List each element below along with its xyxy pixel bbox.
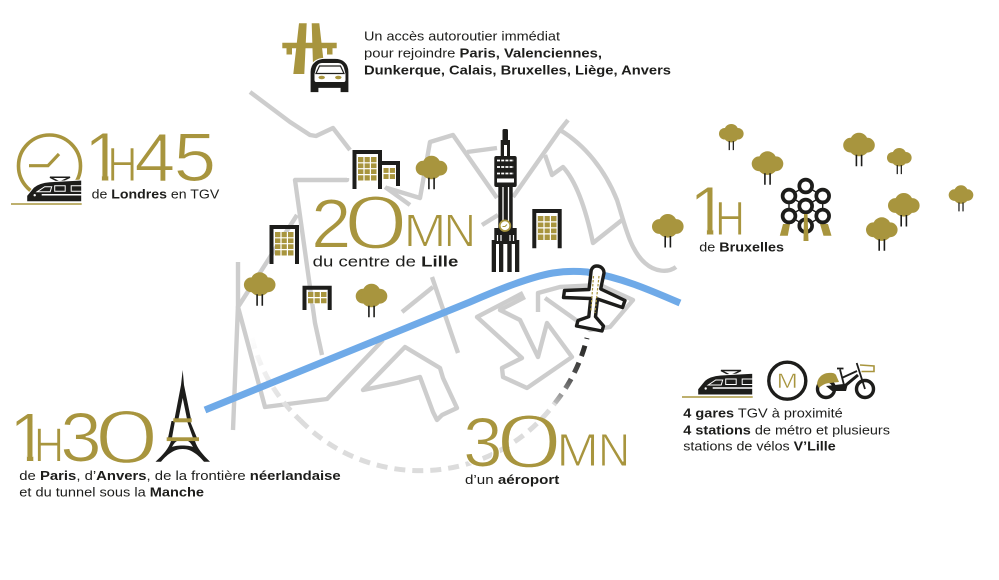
icon: building east <box>534 211 560 248</box>
stat: 1h45 <box>92 134 212 181</box>
text: transport list <box>683 406 891 454</box>
stat: 30mn: N <box>598 424 630 476</box>
text: de Paris: et du tunnel sous la Manche <box>19 485 204 500</box>
stat: 1h45: 1 <box>84 118 123 196</box>
icon: Lille tower <box>492 129 519 272</box>
stat: 30mn: 0 <box>492 404 567 483</box>
text: motorway access: pour rejoindre Paris, Valenciennes, <box>364 46 602 60</box>
stat: 20mn: 0 <box>340 185 412 264</box>
text: de Paris: de Paris , d’Anvers , de la frontière néerlandaise <box>19 468 341 483</box>
text: transport list: 4 gares TGV à proximité <box>683 406 843 421</box>
text: d'un aéroport: d’un aéroport <box>465 472 560 487</box>
road map network <box>233 92 676 430</box>
icon: building west <box>272 227 297 264</box>
stat: 1h Bruxelles: 1 <box>689 172 728 250</box>
stat: 1h45: 5 <box>174 119 216 196</box>
stat: 20mn: N <box>444 205 476 257</box>
stat: 20mn: M <box>404 205 446 257</box>
stat: 30mn <box>463 403 630 483</box>
stat: 1h Bruxelles: H <box>715 193 745 246</box>
text: de Londres en TGV: de Londres en TGV <box>92 186 220 201</box>
dashed route arc <box>252 338 587 471</box>
stat: 20mn <box>311 184 476 264</box>
icon: train, metro and bike <box>682 362 874 399</box>
text: motorway access <box>364 28 671 78</box>
text: transport list: 4 stations de métro et plusieurs <box>683 422 891 437</box>
text: motorway access: Dunkerque, Calais, Bruxelles, Liège, Anvers <box>364 62 671 78</box>
icon: trees <box>244 124 973 317</box>
stat: 30mn: 3 <box>463 403 503 481</box>
icon: airplane <box>564 266 625 331</box>
stat: 30mn: M <box>556 424 599 476</box>
stat: 1h30: 1 <box>9 399 48 477</box>
text: du centre de Lille: du centre de Lille <box>313 254 458 271</box>
icon: Eiffel tower <box>156 370 210 462</box>
text: transport list: stations de vélos V’Lille <box>683 439 836 454</box>
icon: train, metro and bike: M <box>777 370 798 393</box>
river <box>205 271 680 410</box>
stat: 1h30: 3 <box>60 399 102 477</box>
icon: building south <box>304 288 330 310</box>
stat: 1h30: 0 <box>90 399 163 478</box>
text: motorway access: Un accès autoroutier immédiat <box>364 28 560 44</box>
stat: 1h30 <box>16 411 153 463</box>
stat: 1h45: 4 <box>134 119 175 196</box>
icon: motorway and car <box>282 23 349 93</box>
text: de Bruxelles: de Bruxelles <box>699 240 784 255</box>
stat: 1h45: H <box>107 139 137 192</box>
text: de Paris <box>19 468 341 500</box>
icon: Atomium <box>780 180 832 241</box>
icon: clock with train <box>11 135 82 204</box>
stat: 1h Bruxelles <box>696 188 742 235</box>
stat: 20mn: 2 <box>311 184 351 262</box>
stat: 1h30: H <box>34 420 64 473</box>
icon: buildings cluster <box>354 152 398 189</box>
